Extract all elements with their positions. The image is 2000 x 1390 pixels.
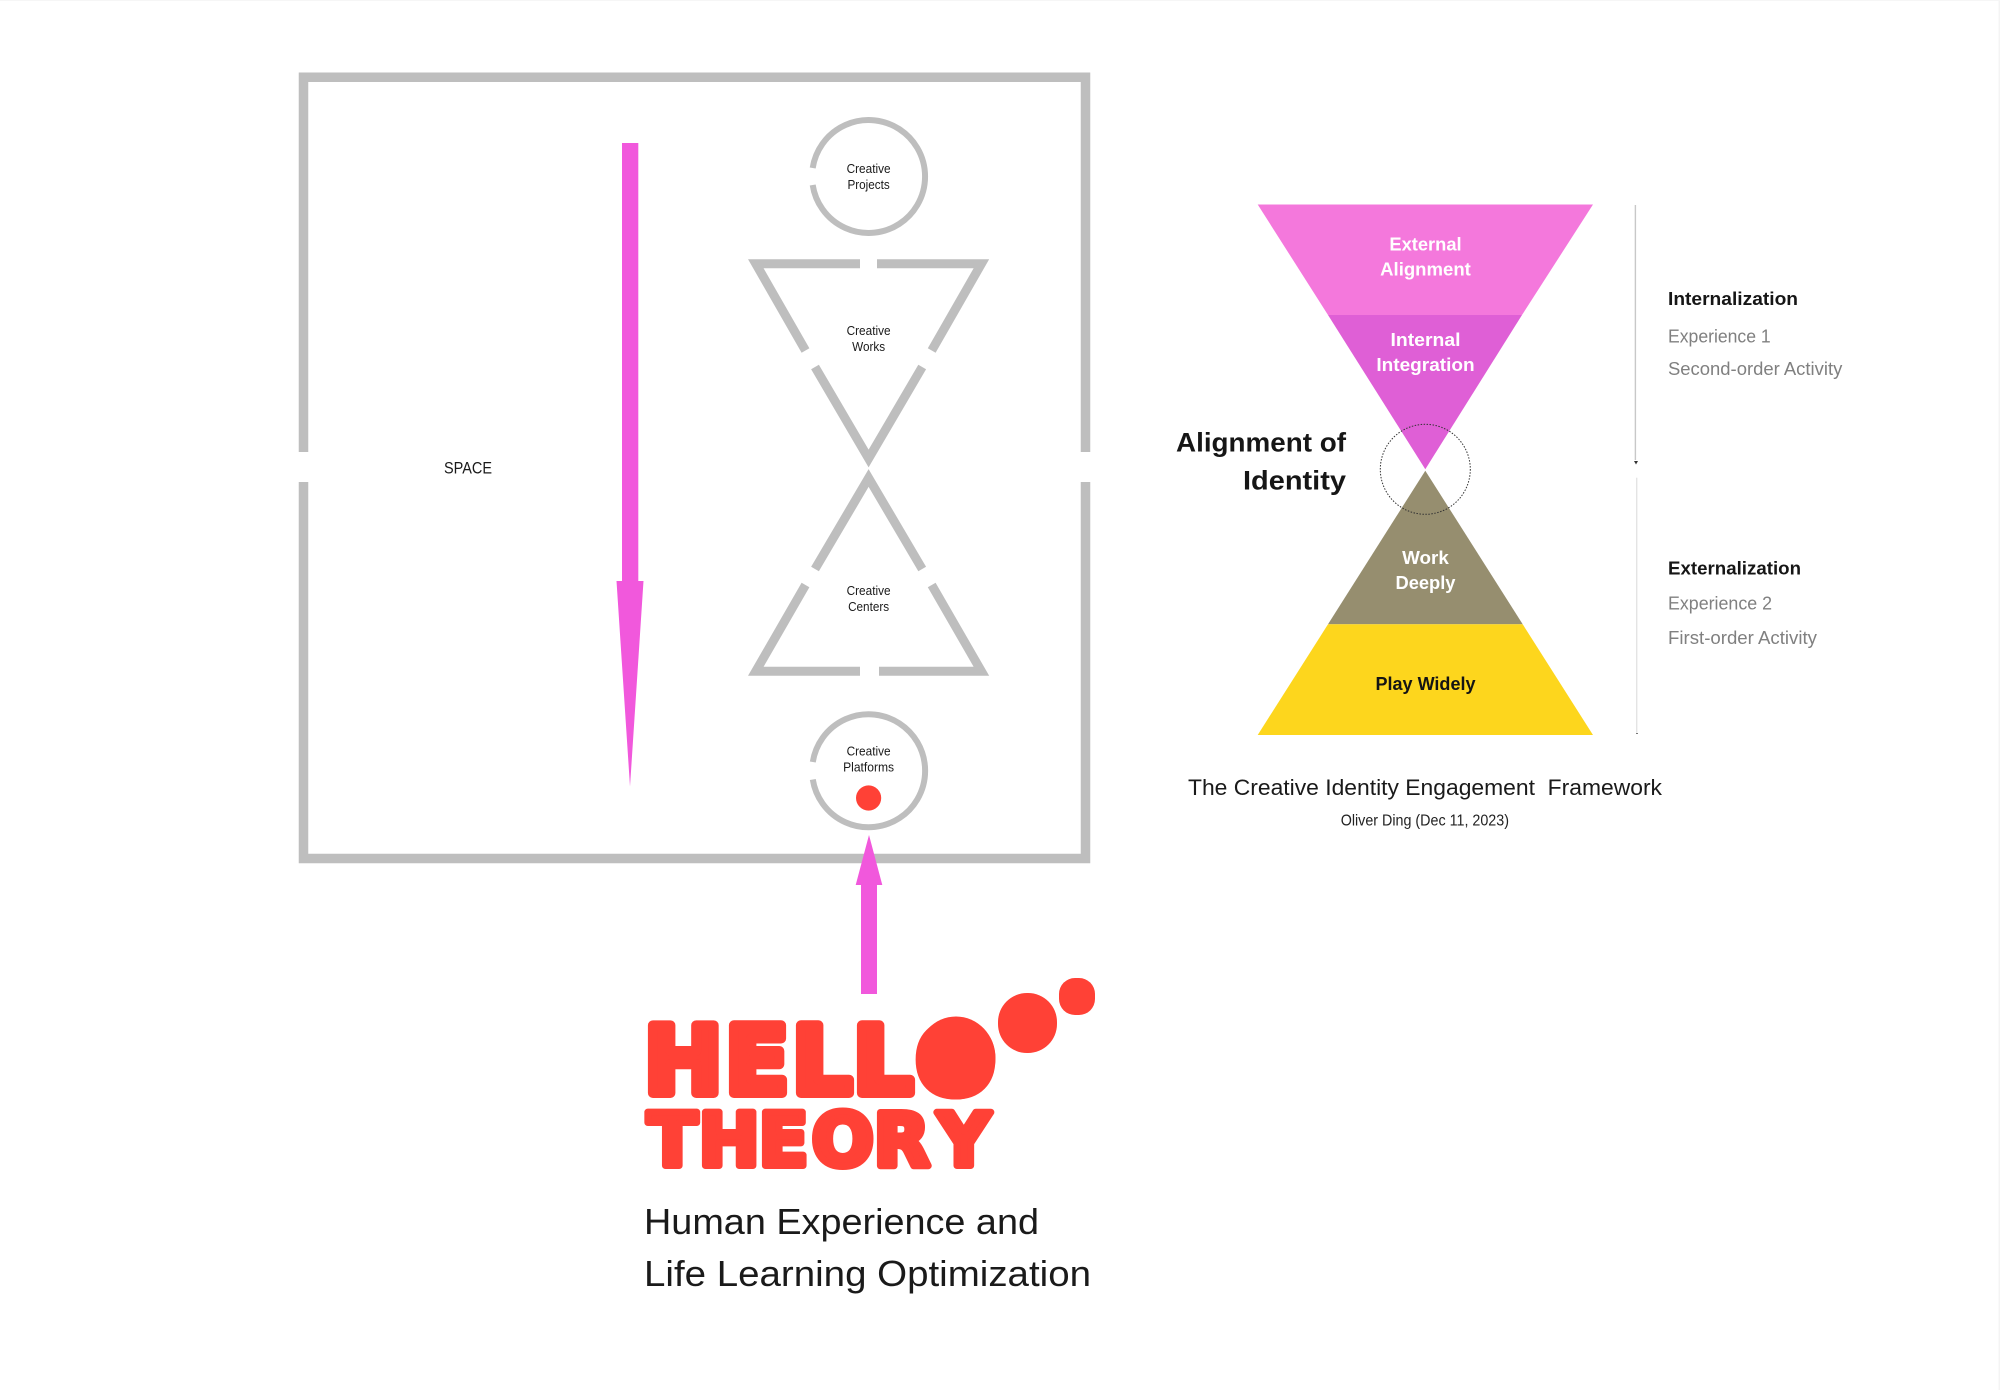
creative platforms circle: Creative [847,744,891,758]
segment: external alignment [1258,204,1593,315]
segment: work deeply: Work [1402,547,1449,568]
segment: internal integration [1328,315,1522,469]
segment: internal integration: Internal [1390,329,1460,350]
heading: alignment of identity: Alignment of [1176,428,1347,458]
arrow: upward pink arrow [856,835,882,994]
chart: creative identity hourglass [1258,204,1593,735]
creative platforms circle [813,714,925,827]
arrow: externalization axis [1636,478,1638,734]
logo: Hello Theory: O [916,1007,995,1115]
creative projects circle [813,120,925,233]
segment: external alignment: External [1389,234,1462,255]
text block: externalization: First-order Activity [1668,628,1818,648]
segment: external alignment: Alignment [1380,259,1471,280]
segment: internal integration: Integration [1376,354,1475,375]
text block: externalization: Externalization [1668,558,1801,578]
segment: play widely: Play Widely [1376,673,1476,694]
frame outline with side openings [304,77,1086,859]
title: framework name: The Creative Identity Engagement Framework [1188,775,1663,800]
arrow: downward pink arrow [616,143,644,786]
creative works inverted triangle: Creative [847,324,891,338]
segment: work deeply: Deeply [1396,572,1456,593]
text block: internalization: Second-order Activity [1668,359,1843,379]
creative works inverted triangle [756,264,981,458]
creative centers triangle: Centers [848,600,889,614]
text block: externalization: Experience 2 [1668,593,1772,613]
tagline: Life Learning Optimization [644,1253,1091,1294]
creative projects circle: Projects [847,178,890,192]
creative works inverted triangle: Works [852,340,885,354]
logo: Hello Theory: HELL [644,1007,913,1115]
logo: Hello Theory: THEORY [648,1100,992,1184]
creative centers triangle: Creative [847,584,891,598]
tagline: Human Experience and [644,1201,1039,1242]
segment: play widely [1258,624,1593,735]
label: SPACE: SPACE [444,458,492,478]
text block: internalization: Internalization [1668,289,1798,309]
text block: externalization [1668,558,1818,648]
creative projects circle: Creative [847,162,891,176]
red dot [856,785,881,811]
creative centers triangle [756,478,981,671]
arrow: internalization axis [1634,205,1638,464]
heading: alignment of identity: Identity [1243,465,1346,495]
tagline [644,1201,1091,1294]
text block: internalization: Experience 1 [1668,327,1771,347]
panel: space frame [304,77,1086,859]
creative platforms circle: Platforms [843,760,894,774]
logo: Hello Theory [644,978,1095,1184]
heading: alignment of identity [1176,428,1347,495]
text block: internalization [1668,289,1843,379]
segment: work deeply [1328,471,1523,624]
dotted circle: alignment point [1380,424,1470,514]
credit line: Oliver Ding (Dec 11, 2023) [1341,813,1509,830]
